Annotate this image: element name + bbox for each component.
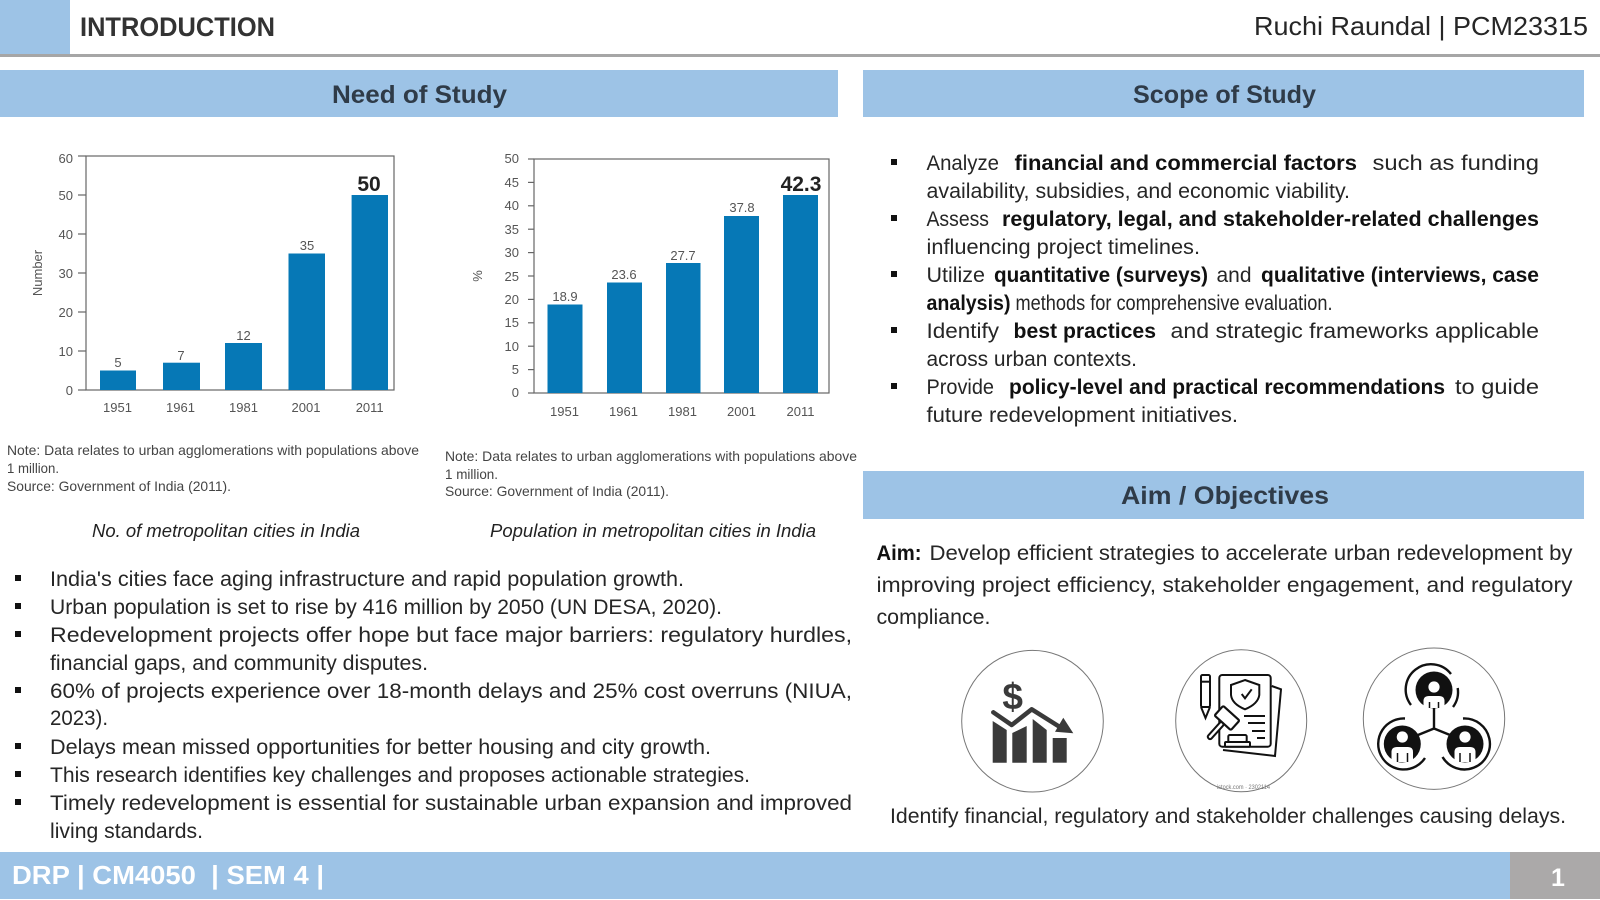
chart: population in metropolitan cities: 37.8 bbox=[729, 200, 755, 215]
bullet list: scope of study: such as funding bbox=[1372, 152, 1539, 175]
bullet list: scope of study: quantitative (surveys) bbox=[994, 264, 1208, 287]
icon: financial decline: $ bbox=[1002, 676, 1023, 717]
aim statement: Develop efficient strategies to accelerate urban redevelopment by bbox=[930, 542, 1573, 565]
chart: population in metropolitan cities: 35 bbox=[505, 222, 519, 237]
chart note: right: Note: Data relates to urban agglomerations with populations above bbox=[445, 448, 857, 464]
chart: number of metropolitan cities: 10 bbox=[59, 344, 73, 359]
bullet list: scope of study: analysis) bbox=[926, 292, 1010, 315]
bullet list: scope of study: and bbox=[1216, 264, 1252, 287]
heading: Aim / Objectives: Aim / Objectives bbox=[1121, 482, 1329, 510]
bullet list: need of study: This research identifies key challenges and proposes actionable strategies. bbox=[50, 764, 750, 787]
bullet list: need of study: financial gaps, and community disputes. bbox=[50, 652, 428, 675]
heading: Aim / Objectives bbox=[863, 471, 1584, 519]
chart: number of metropolitan cities: 60 bbox=[59, 151, 73, 166]
bullet list: scope of study bbox=[891, 152, 1539, 427]
chart: population in metropolitan cities: 42.3 bbox=[781, 173, 821, 196]
chart: number of metropolitan cities: 1981 bbox=[229, 400, 258, 415]
bullet list: scope of study: methods for comprehensive evaluation. bbox=[1016, 292, 1332, 315]
aim statement: Aim: bbox=[876, 542, 922, 565]
bullet list: scope of study: across urban contexts. bbox=[926, 348, 1137, 371]
chart: number of metropolitan cities: 5 bbox=[114, 355, 122, 370]
chart note: left: Note: Data relates to urban agglomerations with populations above bbox=[7, 442, 419, 458]
icon: legal document bbox=[1176, 650, 1307, 792]
chart: population in metropolitan cities: 0 bbox=[512, 385, 519, 400]
chart: population in metropolitan cities: 23.6 bbox=[611, 267, 637, 282]
chart: number of metropolitan cities: 35 bbox=[300, 238, 314, 253]
header bar bbox=[0, 0, 1600, 57]
chart: population in metropolitan cities: 18.9 bbox=[552, 289, 578, 304]
bullet list: scope of study: availability, subsidies, and economic viability. bbox=[926, 180, 1350, 203]
bullet list: scope of study: Assess bbox=[926, 208, 989, 231]
aim statement: compliance. bbox=[876, 606, 990, 629]
bullet list: scope of study: to guide bbox=[1455, 376, 1539, 399]
chart note: right: 1 million. bbox=[445, 466, 498, 482]
chart: population in metropolitan cities: 2011 bbox=[787, 404, 814, 419]
chart: number of metropolitan cities: 40 bbox=[59, 227, 73, 242]
bullet list: need of study: 60% of projects experience over 18-month delays and 25% cost overruns (NIUA, bbox=[50, 680, 852, 703]
heading: Need of Study bbox=[0, 70, 838, 117]
chart: population in metropolitan cities: 15 bbox=[505, 315, 519, 330]
bullet list: need of study bbox=[15, 568, 852, 843]
course label: DRP | CM4050 | SEM 4 | bbox=[12, 860, 324, 890]
chart note: left: 1 million. bbox=[7, 460, 59, 476]
bullet list: need of study: living standards. bbox=[50, 820, 203, 843]
bullet list: scope of study: future redevelopment initiatives. bbox=[926, 404, 1238, 427]
icon: financial decline bbox=[962, 650, 1103, 792]
chart: population in metropolitan cities bbox=[470, 151, 829, 419]
caption: right chart: Population in metropolitan cities in India bbox=[490, 521, 816, 541]
chart: number of metropolitan cities: 7 bbox=[177, 348, 185, 363]
chart: population in metropolitan cities: 5 bbox=[512, 362, 519, 377]
bullet list: need of study: India's cities face aging infrastructure and rapid population growth. bbox=[50, 568, 684, 591]
heading: Scope of Study: Scope of Study bbox=[1133, 81, 1316, 109]
bullet list: scope of study: Identify bbox=[926, 320, 1000, 343]
chart: number of metropolitan cities: 1951 bbox=[103, 400, 132, 415]
chart note: right bbox=[445, 448, 857, 499]
left person bbox=[1378, 718, 1425, 769]
chart: number of metropolitan cities: Number bbox=[30, 249, 45, 296]
chart: population in metropolitan cities: 27.7 bbox=[670, 248, 696, 263]
chart: population in metropolitan cities: 40 bbox=[505, 198, 519, 213]
page title: INTRODUCTION bbox=[80, 12, 275, 42]
bullet list: need of study: Redevelopment projects offer hope but face major barriers: regulatory hurdles, bbox=[50, 624, 852, 647]
bullet list: scope of study: and strategic frameworks applicable bbox=[1170, 320, 1539, 343]
author and id: Ruchi Raundal | PCM23315 bbox=[1254, 11, 1588, 41]
bullet list: scope of study: best practices bbox=[1014, 320, 1156, 343]
bullet list: scope of study: financial and commercial factors bbox=[1014, 152, 1357, 175]
aim statement: improving project efficiency, stakeholder engagement, and regulatory bbox=[876, 574, 1573, 597]
chart: population in metropolitan cities: 10 bbox=[505, 339, 519, 354]
page number bbox=[1510, 852, 1600, 899]
chart: population in metropolitan cities: 25 bbox=[505, 269, 519, 284]
chart: population in metropolitan cities: 45 bbox=[505, 175, 519, 190]
chart: number of metropolitan cities: 2001 bbox=[292, 400, 320, 415]
top person bbox=[1406, 664, 1458, 708]
chart: number of metropolitan cities: 50 bbox=[357, 173, 381, 196]
footer bar bbox=[0, 852, 1510, 899]
chart: population in metropolitan cities: 2001 bbox=[727, 404, 756, 419]
chart: number of metropolitan cities: 1961 bbox=[166, 400, 195, 415]
chart: number of metropolitan cities: 20 bbox=[59, 305, 73, 320]
bullet list: scope of study: influencing project timelines. bbox=[926, 236, 1200, 259]
bullet list: need of study: Urban population is set to rise by 416 million by 2050 (UN DESA, 2020). bbox=[50, 596, 722, 619]
chart: population in metropolitan cities: 1961 bbox=[609, 404, 638, 419]
bullet list: scope of study: policy-level and practical recommendations bbox=[1009, 376, 1445, 399]
chart: number of metropolitan cities: 0 bbox=[66, 383, 73, 398]
bullet list: scope of study: qualitative (interviews, case bbox=[1261, 264, 1539, 287]
caption: left chart: No. of metropolitan cities in India bbox=[92, 521, 360, 541]
chart note: left bbox=[7, 442, 419, 494]
aim statement bbox=[876, 542, 1573, 629]
chart: population in metropolitan cities: 30 bbox=[505, 245, 519, 260]
chart note: right: Source: Government of India (2011). bbox=[445, 483, 669, 499]
watermark text: istock.com · 2302114 bbox=[1217, 784, 1270, 791]
bullet list: scope of study: Analyze bbox=[926, 152, 999, 175]
bullet list: scope of study: regulatory, legal, and stakeholder-related challenges bbox=[1002, 208, 1539, 231]
bullet list: scope of study: Provide bbox=[926, 376, 994, 399]
bullet list: need of study: 2023). bbox=[50, 707, 108, 730]
chart: number of metropolitan cities: 50 bbox=[59, 188, 73, 203]
chart: number of metropolitan cities bbox=[30, 151, 394, 415]
chart: number of metropolitan cities: 30 bbox=[59, 266, 73, 281]
chart: population in metropolitan cities: 20 bbox=[505, 292, 519, 307]
page number: 1 bbox=[1551, 864, 1565, 892]
bullet list: need of study: Delays mean missed opportunities for better housing and city growth. bbox=[50, 736, 711, 759]
bullet list: scope of study: Utilize bbox=[926, 264, 985, 287]
chart: number of metropolitan cities: 12 bbox=[236, 328, 251, 343]
chart: number of metropolitan cities: 2011 bbox=[356, 400, 384, 415]
heading: Scope of Study bbox=[863, 70, 1584, 117]
chart: population in metropolitan cities: 1951 bbox=[550, 404, 579, 419]
right person bbox=[1442, 718, 1490, 769]
bullet list: need of study: Timely redevelopment is essential for sustainable urban expansion and improved bbox=[50, 792, 852, 815]
chart: population in metropolitan cities: 50 bbox=[505, 151, 519, 166]
chart: population in metropolitan cities: 1981 bbox=[668, 404, 697, 419]
icon: stakeholders network bbox=[1363, 648, 1505, 789]
heading: Need of Study: Need of Study bbox=[332, 81, 507, 109]
objective caption: Identify financial, regulatory and stakeholder challenges causing delays. bbox=[890, 805, 1566, 828]
chart: population in metropolitan cities: % bbox=[470, 270, 485, 282]
chart note: left: Source: Government of India (2011). bbox=[7, 478, 231, 494]
